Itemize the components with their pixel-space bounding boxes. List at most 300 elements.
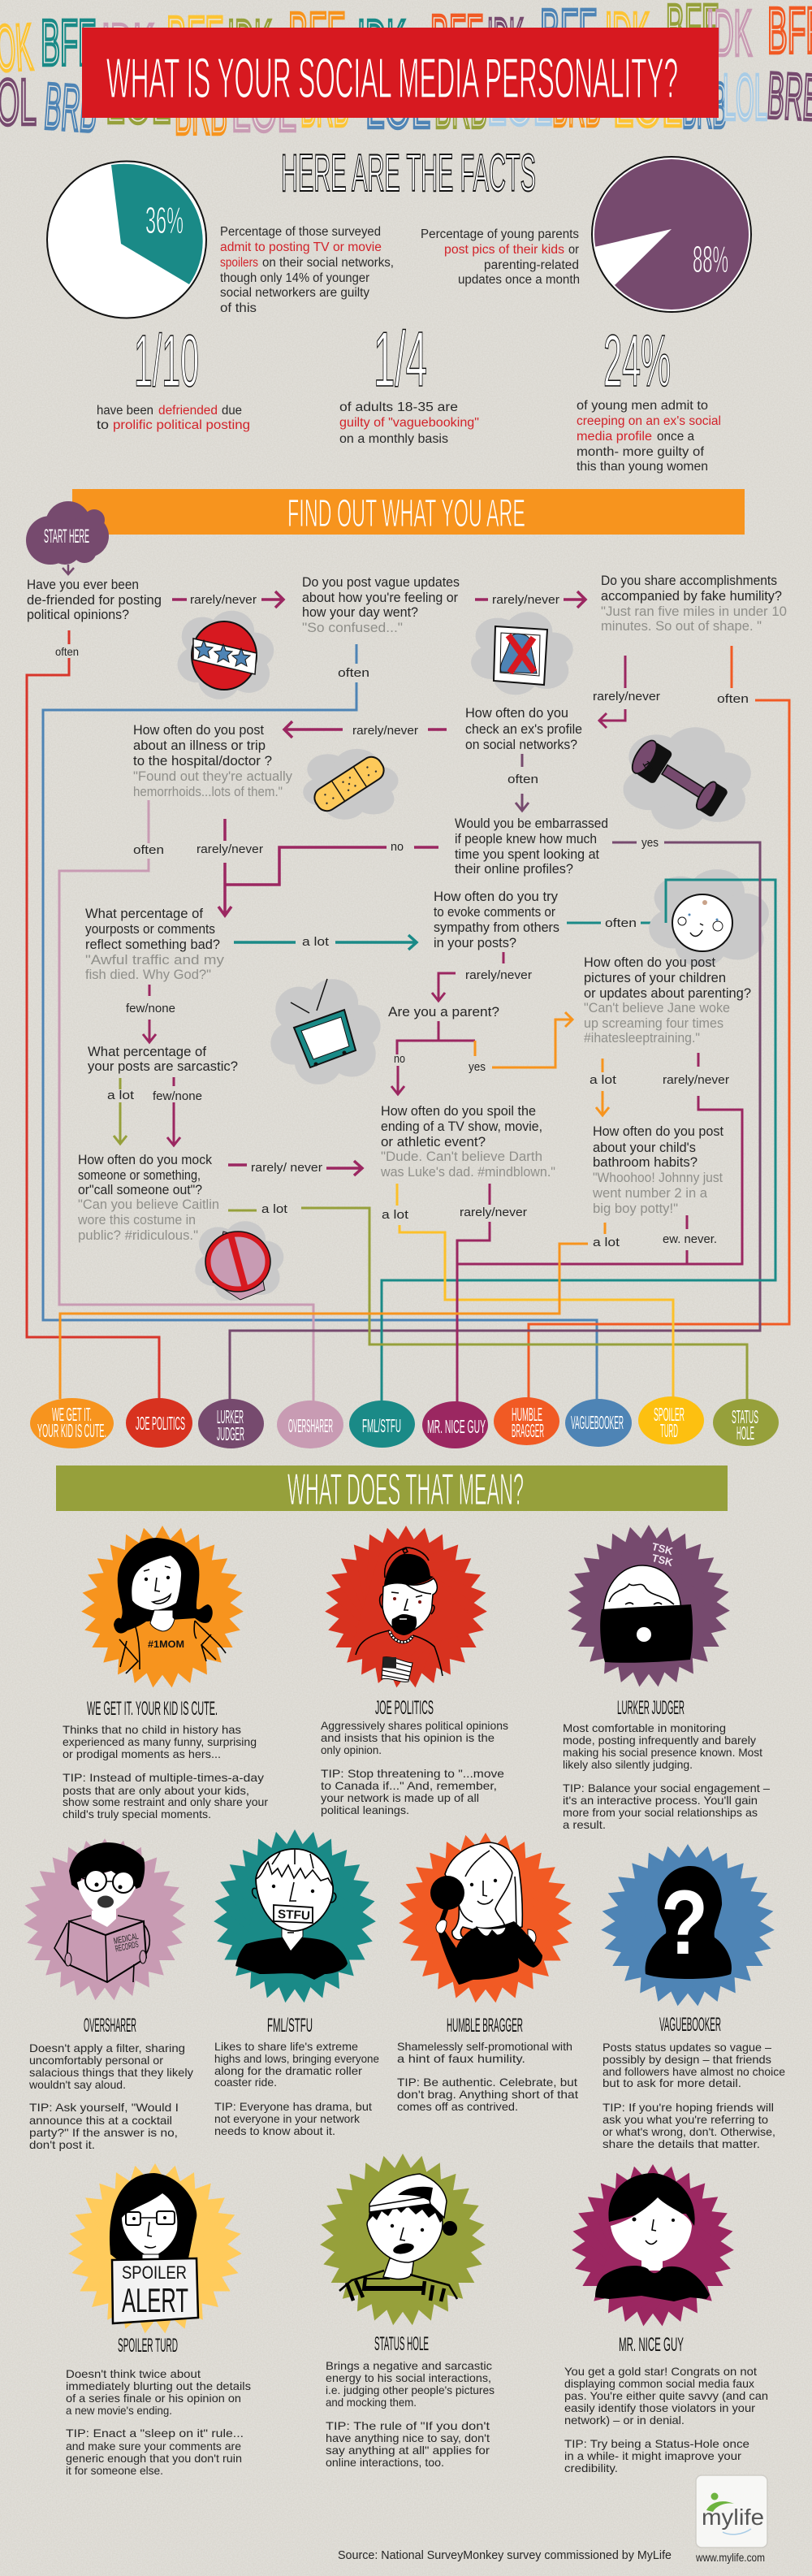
description: fml/stfu (214, 2040, 379, 2137)
label: often: often (55, 645, 79, 658)
description: spoiler turd: a new movie's ending. (66, 2404, 172, 2417)
title banner (82, 28, 719, 118)
description: oversharer: announce this at a cocktail (29, 2114, 172, 2127)
label: often: often (133, 843, 164, 857)
text: HUMBLE BRAGGER (447, 2015, 523, 2037)
question: illness: hemorrhoids...lots of them." (133, 784, 283, 799)
question: ex's profile: How often do you (465, 705, 568, 721)
question: bathroom habits: bathroom habits? (593, 1154, 698, 1170)
description: mr nice guy: pas. You're either quite savvy (and can (564, 2389, 768, 2402)
arrow: few/none to sarcastic (126, 985, 175, 1042)
icon: campaign badge (178, 611, 274, 699)
label: a lot: a lot (382, 1208, 409, 1222)
description: joe politics: and insists that his opinion is the (321, 1731, 495, 1744)
connector overlay: purple line over baby (758, 861, 762, 983)
bubble: vaguebooker (565, 1399, 632, 1447)
description: we get it (63, 1723, 268, 1821)
arrow: rarely/never to spoil (228, 1161, 362, 1175)
question: mock someone: someone or something, (78, 1167, 201, 1183)
stat: 1/10: due (222, 404, 242, 418)
description: status hole: online interactions, too. (326, 2456, 444, 2469)
description: spoiler turd: Doesn't think twice about (66, 2367, 201, 2380)
question: bathroom habits: How often do you post (593, 1123, 723, 1139)
description: status hole (326, 2359, 495, 2469)
description: oversharer: TIP: Ask yourself, "Would I (29, 2101, 179, 2114)
portrait: vaguebooker (601, 1818, 802, 2016)
portrait: lurker judger: TSK (650, 1540, 675, 1557)
text: spoilers fact: spoilers (220, 256, 258, 270)
question: something bad (85, 906, 225, 982)
arrow: yes branch to children (469, 1012, 572, 1074)
bubble: lurker judger: JUDGER (217, 1423, 244, 1444)
personality bubbles (30, 1396, 779, 1448)
stat: 1/4: 1/4 (374, 316, 427, 403)
question: pictures of children: #ihatesleeptraining." (584, 1030, 700, 1046)
question: sarcastic: your posts are sarcastic? (88, 1059, 238, 1074)
label: a lot: a lot (593, 1236, 620, 1249)
question: bathroom habits (592, 1123, 723, 1216)
bubble: status hole (713, 1399, 779, 1446)
description: mr nice guy: easily identify those violators in your (564, 2401, 755, 2414)
background word pattern: LOL (613, 67, 682, 140)
question: embarrassed: their online profiles? (455, 861, 573, 877)
description: fml/stfu: needs to know about it. (214, 2124, 335, 2137)
question: mock someone (77, 1152, 219, 1243)
portrait: vaguebooker: ? (661, 1872, 708, 1973)
background word pattern: BFF (288, 0, 345, 71)
question: mock someone: or"call someone out"? (78, 1182, 202, 1197)
description: vaguebooker (603, 2041, 785, 2150)
description: we get it: Thinks that no child in history has (63, 1723, 241, 1736)
description: vaguebooker: or what's wrong, don't. Otherwise, (603, 2125, 775, 2138)
question: pictures of children: or updates about parenting? (584, 985, 751, 1001)
stat: 24%: month- more guilty of (577, 445, 705, 459)
portrait: joe politics (325, 1500, 513, 1698)
description: lurker judger: a result. (563, 1818, 606, 1831)
text: spoilers fact: though only 14% of younger (220, 271, 369, 285)
bubble: fml/stfu: FML/STFU (362, 1415, 401, 1436)
question: bathroom habits: went number 2 in a (592, 1185, 708, 1201)
arrow: rarely/never to spoil: rarely/ never (251, 1161, 322, 1175)
description: lurker judger: Most comfortable in monitoring (563, 1721, 726, 1734)
stat: 24%: of young men admit to (577, 399, 708, 413)
description: fml/stfu: Likes to share life's extreme (214, 2040, 358, 2053)
question: vague updates: "So confused..." (302, 620, 403, 635)
background word pattern: IDK (605, 0, 650, 71)
arrow: rarely/never to percentage bad: rarely/never (197, 842, 263, 856)
description: spoiler turd: generic enough that you don't ruin (66, 2452, 242, 2465)
text: young parents fact: Percentage of young parents (421, 227, 579, 241)
description: joe politics: only opinion. (321, 1743, 382, 1756)
description: lurker judger (563, 1721, 770, 1831)
description: lurker judger: making his social presence known. Most (563, 1746, 762, 1759)
description: spoiler turd: and make sure your comments are (66, 2440, 241, 2453)
description: lurker judger: likely also silently judging. (563, 1758, 693, 1771)
arrow: few/none to mock: few/none (153, 1089, 202, 1103)
arrow: rarely/never to percentage bad: no (391, 840, 404, 854)
question: spoil the ending: or athletic event? (381, 1134, 486, 1149)
portrait: spoiler turd (68, 2136, 270, 2344)
connector: orange-red often to Humble Bragger (529, 646, 789, 1399)
portrait: mr nice guy (572, 2138, 760, 2336)
section bar: what does that mean (56, 1464, 728, 1514)
description: vaguebooker: and followers have almost no choice (603, 2065, 785, 2078)
stat: 1/4: of adults 18-35 are (339, 400, 458, 414)
arrow: rarely/never to vague updates: rarely/never (190, 593, 257, 607)
portrait: spoiler turd: ALERT (122, 2281, 188, 2319)
pie chart: 88% (592, 157, 751, 312)
background word pattern: IDK (357, 6, 406, 79)
bubble: mr nice guy (422, 1401, 488, 1448)
question: de-friended: political opinions? (27, 607, 129, 622)
background word pattern: BRB (552, 67, 601, 140)
text: young parents fact (421, 227, 580, 287)
stat: 24%: media profile (577, 430, 652, 444)
portrait: lurker judger (568, 1499, 756, 1697)
description: fml/stfu: TIP: Everyone has drama, but (214, 2100, 372, 2113)
logo: mylife (696, 2475, 767, 2548)
personality bubbles: YOUR KID IS CUTE. (37, 1420, 106, 1441)
arrow: a lot to evoke sympathy: a lot (302, 935, 330, 949)
description: oversharer: party?" If the answer is no, (29, 2126, 178, 2139)
question: spoil the ending (380, 1103, 555, 1180)
question: vague updates: about how you're feeling or (302, 590, 458, 605)
description: humble bragger: comes off as contrived. (397, 2100, 518, 2113)
connector: pink often to Oversharer (59, 800, 313, 1403)
text: young parents fact: parenting-related (484, 258, 579, 272)
section bar: find out what you are (72, 489, 745, 535)
text: spoilers fact: Percentage of those surveyed (220, 225, 381, 239)
background word pattern: IDK (227, 6, 272, 79)
text: spoilers fact: admit to posting TV or movie (220, 240, 382, 254)
arrow: a lot to bathroom habits (590, 1059, 617, 1115)
portrait: we get it, your kid is cute: #1MOM (148, 1639, 184, 1650)
question: evoke sympathy (434, 889, 559, 950)
description: vaguebooker: but to ask for more detail. (603, 2076, 741, 2089)
icon: dumbbell (623, 727, 751, 829)
source line: Source: National SurveyMonkey survey commissioned by MyLife (338, 2548, 672, 2562)
personality bubbles: OVERSHARER (288, 1415, 333, 1436)
arrow: a lot to evoke sympathy (234, 935, 417, 950)
question: fake humility: "Just ran five miles in under 10 (601, 604, 787, 619)
description: joe politics: Aggressively shares political opinions (321, 1719, 508, 1732)
portrait: lurker judger: TSK (650, 1552, 675, 1569)
background word pattern: BFF (166, 3, 223, 76)
background word pattern: LOL (365, 69, 430, 141)
question: mock someone: public? #ridiculous." (78, 1227, 198, 1243)
description: we get it: child's truly special moments. (63, 1808, 211, 1821)
question: evoke sympathy: to evoke comments or (434, 904, 555, 920)
connector: red often to Joe Politics (27, 630, 159, 1399)
question: ex's profile (465, 705, 582, 752)
description: joe politics: your network is made up of all (321, 1791, 479, 1804)
description: vaguebooker: Posts status updates so vague – (603, 2041, 771, 2054)
description: lurker judger: mode, posting infrequently and barely (563, 1734, 756, 1747)
question: ex's profile: on social networks? (465, 737, 577, 752)
arrow: rarely/never to parent: rarely/never (465, 968, 532, 982)
bubble: humble bragger: BRAGGER (512, 1420, 544, 1441)
question: mock someone: "Can you believe Caitlin (78, 1197, 219, 1212)
background word pattern (0, 0, 812, 148)
description: status hole: Brings a negative and sarcastic (326, 2359, 492, 2372)
text: spoilers fact: social networkers are guilty (220, 286, 369, 300)
background word pattern: BFF (430, 2, 483, 74)
label: a lot: a lot (261, 1202, 288, 1216)
description: we get it: or prodigal moments as hers... (63, 1747, 221, 1760)
question: embarrassed: Would you be embarrassed (455, 816, 608, 831)
personality bubbles: VAGUEBOOKER (571, 1412, 624, 1433)
background word pattern: BRB (42, 70, 100, 145)
label: often: often (717, 692, 749, 706)
connector: magenta to Mr Nice Guy (457, 1053, 742, 1403)
portrait: humble bragger (399, 1805, 600, 2013)
label: rarely/never: rarely/never (460, 1206, 527, 1219)
text: STATUS HOLE (374, 2333, 429, 2355)
icon: television (270, 979, 381, 1085)
arrow: rarely/never to ex's profile: rarely/never (593, 690, 660, 704)
background word pattern: BRB (434, 69, 487, 141)
bubble: fml/stfu (349, 1401, 415, 1448)
description: vaguebooker: TIP: If you're hoping friends will (603, 2101, 774, 2114)
question: pictures of children: up screaming four times (584, 1015, 723, 1031)
connector: orange a lot to We Get It (60, 1223, 605, 1399)
bubble: humble bragger: HUMBLE (512, 1404, 542, 1425)
description: status hole: and mocking them. (326, 2396, 417, 2409)
icon: dumbbell: 10 (640, 759, 655, 774)
connector: yellow a lot to Spoiler Turd (397, 1184, 673, 1398)
arrow: often to embarrassed question (508, 754, 538, 811)
bubble: we get it: WE GET IT. (52, 1404, 92, 1425)
pie chart: 88%: 88% (693, 238, 728, 280)
bubble: oversharer (277, 1401, 343, 1448)
description: vaguebooker: possibly by design – that friends (603, 2053, 771, 2066)
question: de-friended: de-friended for posting (27, 592, 162, 608)
background word pattern: LOL (231, 72, 296, 145)
arrow: no branch (391, 1021, 475, 1094)
text: OVERSHARER (84, 2015, 136, 2037)
question: vague updates: how your day went? (302, 604, 418, 620)
stat: 1/10 (97, 321, 250, 432)
bubble: lurker judger (198, 1399, 264, 1448)
arrow: rarely/never to accomplishments: rarely/never (492, 593, 559, 607)
stat: 24%: once a (657, 430, 694, 444)
question: illness: "Found out they're actually (133, 768, 292, 784)
description: lurker judger: TIP: Balance your social engagement – (563, 1782, 770, 1795)
description: status hole: i.e. judging other people's pictures (326, 2383, 495, 2396)
question: are you a parent: Are you a parent? (388, 1004, 499, 1020)
text: spoilers fact: on their social networks, (262, 256, 394, 270)
description: we get it: posts that are only about your kids, (63, 1784, 249, 1797)
arrow: rarely/never to illness: rarely/never (352, 724, 418, 738)
arrow: rarely/never to accomplishments (475, 591, 585, 608)
arrow: rarely/never to parent (432, 952, 532, 1001)
question: illness: How often do you post (133, 722, 264, 738)
question: sarcastic (88, 1044, 238, 1074)
question: pictures of children: pictures of your children (584, 970, 726, 985)
background word pattern: IDK (102, 11, 154, 83)
bubble: spoiler turd (638, 1396, 704, 1444)
description: joe politics (321, 1719, 508, 1816)
description: mr nice guy: network) – or in denial. (564, 2414, 685, 2427)
description: we get it: show some restraint and only share your (63, 1795, 268, 1808)
question: illness: to the hospital/doctor ? (133, 753, 272, 768)
personality bubbles: JOE POLITICS (136, 1413, 185, 1434)
icon: crossed-out photo (471, 612, 573, 695)
portrait: we get it, your kid is cute (81, 1500, 270, 1698)
description: fml/stfu: not everyone in your network (214, 2112, 361, 2125)
arrow: a lot to mock (107, 1078, 135, 1144)
start here cloud: START HERE (44, 526, 89, 548)
description: oversharer: Doesn't apply a filter, sharing (29, 2041, 185, 2054)
bubble: status hole: STATUS (732, 1406, 758, 1427)
text: MR. NICE GUY (619, 2334, 684, 2356)
arrow: rarely/never to vague updates (172, 591, 283, 608)
description: joe politics: political leanings. (321, 1803, 409, 1816)
label: often: often (605, 916, 637, 930)
question: mock someone: How often do you mock (78, 1152, 212, 1167)
description: vaguebooker: ask you what you're referring to (603, 2113, 768, 2126)
question: vague updates (302, 574, 460, 635)
description: status hole: have anything nice to say, don't (326, 2431, 490, 2444)
portrait: status hole (320, 2126, 512, 2336)
question: mock someone: wore this costume in (77, 1212, 196, 1227)
description: fml/stfu: highs and lows, bringing everyone (214, 2052, 379, 2065)
arrow: rarely/never to ex's profile (593, 656, 660, 728)
description: mr nice guy: credibility. (564, 2461, 618, 2474)
arrow: no branch: no (394, 1052, 405, 1066)
description: humble bragger: a hint of faux humility. (397, 2052, 525, 2065)
question: evoke sympathy: in your posts? (434, 935, 516, 950)
connector: olive a lot to Status Hole (228, 1208, 747, 1401)
arrow: often to embarrassed question: often (508, 773, 538, 786)
question: spoil the ending: "Dude. Can't believe Darth (381, 1149, 542, 1164)
portrait: fml/stfu: STFU (278, 1907, 310, 1923)
description: mr nice guy: TIP: Try being a Status-Hole once (564, 2437, 749, 2450)
question: something bad: reflect something bad? (85, 937, 220, 952)
description: oversharer: salacious things that they likely (29, 2066, 193, 2079)
stat: 1/4: guilty of "vaguebooking" (339, 416, 479, 430)
description: spoiler turd: immediately blurting out the details (66, 2379, 251, 2392)
description: spoiler turd: of a series finale or his opinion on (66, 2392, 241, 2405)
label: rarely/never: rarely/never (663, 1073, 729, 1087)
arrow: a lot to mock: a lot (107, 1089, 135, 1102)
question: bathroom habits: "Whoohoo! Johnny just (593, 1170, 723, 1185)
stat: 1/10: prolific political posting (113, 418, 250, 432)
question: sarcastic: What percentage of (88, 1044, 206, 1059)
description: fml/stfu: coaster ride. (214, 2076, 277, 2089)
arrow: a lot to bathroom habits: a lot (590, 1073, 617, 1087)
question: fake humility: Do you share accomplishments (601, 573, 777, 588)
question: bathroom habits: big boy potty!" (593, 1201, 678, 1216)
stat: 24%: creeping on an ex's social (577, 414, 721, 428)
question: something bad: What percentage of (85, 906, 203, 921)
background word pattern: BFF (41, 6, 96, 79)
pie chart: 36% (47, 161, 206, 318)
portrait: fml/stfu (214, 1801, 402, 2013)
stat: 1/10: 1/10 (134, 321, 199, 402)
arrow: yes branch to children: yes (469, 1060, 486, 1074)
description: spoiler turd: TIP: Enact a "sleep on it" rule... (66, 2427, 244, 2440)
stat: 24%: 24% (603, 321, 671, 402)
background word pattern: BRB (175, 76, 227, 148)
bubble: lurker judger: LURKER (217, 1406, 244, 1427)
description: status hole: TIP: The rule of "If you don't (326, 2419, 490, 2432)
bubble: humble bragger (494, 1397, 559, 1445)
description: status hole: energy to his social interactions, (326, 2371, 491, 2384)
description: mr nice guy: displaying common social media faux (564, 2377, 754, 2390)
description: vaguebooker: share the details that matter. (603, 2137, 760, 2150)
question: illness (133, 722, 292, 799)
description: spoiler turd: it for someone else. (66, 2464, 163, 2477)
description: lurker judger: it's an interactive process. You'll gain (563, 1794, 758, 1807)
question: de-friended (27, 577, 162, 622)
stat: 24%: this than young women (577, 460, 708, 474)
website url: www.mylife.com (695, 2551, 765, 2564)
text: FML/STFU (267, 2015, 313, 2037)
text: young parents fact: or (568, 243, 579, 257)
question: spoil the ending: How often do you spoil the (381, 1103, 536, 1119)
text: spoilers fact (220, 225, 394, 315)
stat: 1/4: on a monthly basis (339, 432, 448, 446)
description: oversharer: wouldn't say aloud. (28, 2078, 126, 2091)
background word pattern: LOL (106, 64, 171, 136)
text: SPOILER TURD (118, 2335, 178, 2357)
question: pictures of children (584, 955, 751, 1046)
portrait: oversharer: MEDICAL (113, 1932, 140, 1946)
description: mr nice guy: You get a gold star! Congrats on not (564, 2365, 757, 2378)
text: spoilers fact: of this (220, 301, 257, 315)
arrow: few/none to mock (153, 1077, 202, 1145)
question: something bad: yourposts or comments (85, 921, 215, 937)
description: status hole: say anything at all" applies for (326, 2444, 490, 2457)
question: pictures of children: How often do you post (584, 955, 715, 970)
label: often: often (338, 666, 369, 680)
description: humble bragger (397, 2040, 578, 2113)
stat: 24% (577, 321, 721, 474)
description: oversharer (28, 2041, 193, 2151)
background word pattern: BRB (300, 67, 349, 140)
question: spoil the ending: was Luke's dad. #mindblown." (380, 1164, 555, 1180)
section bar: find out what you are: FIND OUT WHAT YOU ARE (287, 492, 525, 535)
portrait: oversharer: RECORDS (114, 1940, 140, 1955)
description: spoiler turd (66, 2367, 251, 2477)
background word pattern: LOL (487, 66, 552, 138)
description: we get it: experienced as many funny, surprising (63, 1735, 257, 1748)
logo: mylife: mylife (702, 2505, 764, 2530)
question: something bad: fish died. Why God?" (85, 967, 211, 982)
background word pattern: IDK (487, 5, 524, 77)
description: humble bragger: TIP: Be authentic. Celebrate, but (397, 2076, 577, 2089)
stat: 1/10: defriended (158, 404, 218, 418)
description: lurker judger: more from your social relationships as (563, 1806, 758, 1819)
question: vague updates: Do you post vague updates (302, 574, 460, 590)
icon: baby face (649, 869, 769, 967)
portrait: oversharer (24, 1812, 212, 2011)
connector: teal often to FML (382, 880, 775, 1401)
arrow: rarely/never to illness (284, 721, 447, 738)
question: something bad: "Awful traffic and my (85, 952, 225, 968)
bubble: spoiler turd: TURD (660, 1420, 678, 1441)
stat: 1/10: to (97, 418, 109, 432)
description: fml/stfu: along for the dramatic roller (214, 2064, 362, 2077)
description: joe politics: to Canada if..." And, remember, (321, 1779, 497, 1792)
question: embarrassed: time you spent looking at (455, 846, 599, 862)
text: young parents fact: post pics of their kids (444, 243, 564, 257)
label: ew. never.: ew. never. (663, 1232, 717, 1246)
bubble: spoiler turd: SPOILER (654, 1404, 685, 1425)
question: bathroom habits: about your child's (593, 1140, 696, 1155)
question: embarrassed: if people knew how much (455, 831, 597, 846)
